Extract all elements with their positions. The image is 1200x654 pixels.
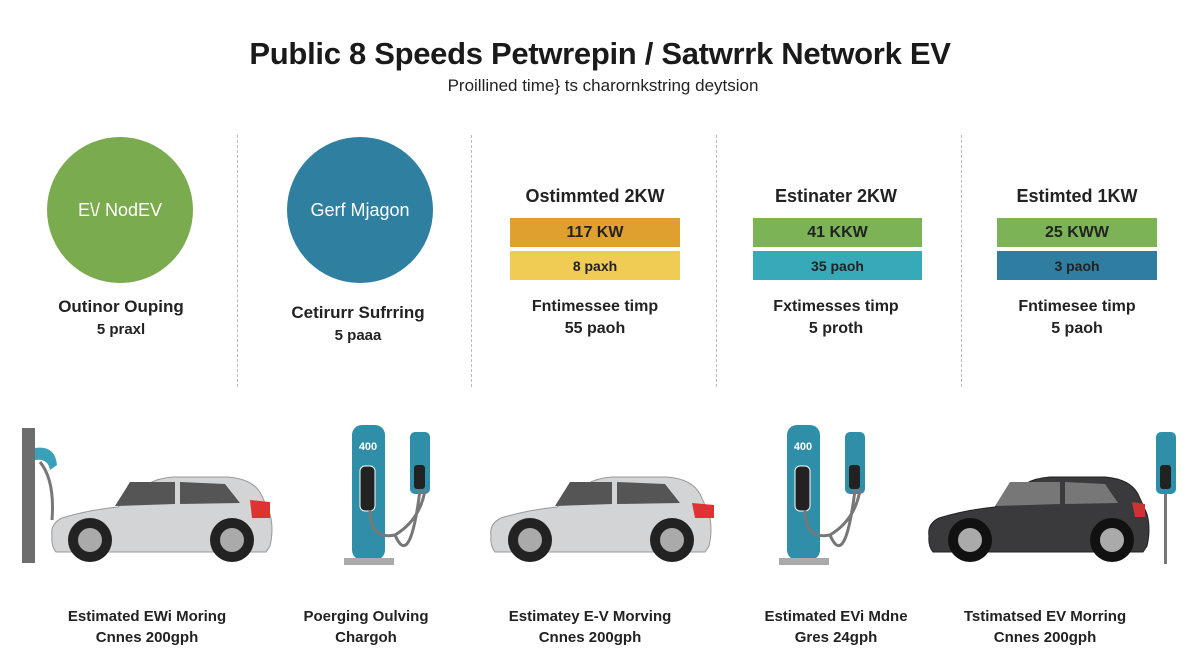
text: Estimated EWi Moring (68, 608, 226, 625)
text: Cnnes 200gph (994, 629, 1096, 646)
text: 8 paxh (573, 258, 617, 274)
icon: post charger (1156, 432, 1176, 564)
icon: car 2 (491, 477, 714, 562)
text: circle 1 label: Outinor Ouping (58, 297, 184, 316)
text: circle 1 label: 5 praxl (97, 321, 145, 338)
icon: car 1 (52, 477, 272, 562)
text: 5 proth (809, 320, 863, 337)
text: 3 paoh (1054, 258, 1100, 274)
subtitle: Proillined time} ts charornkstring deytsion (448, 76, 758, 95)
text: Cnnes 200gph (96, 629, 198, 646)
text: circle 1 label (58, 297, 184, 338)
text: Estinater 2KW (775, 186, 897, 206)
panel: circle 2 (287, 137, 433, 283)
panel: column 5 (997, 186, 1157, 337)
text: circle 2 label (291, 303, 425, 344)
text: Ostimmted 2KW (525, 186, 665, 206)
icon: charger 1: 400 (359, 441, 377, 453)
panel: circle 1: E\/ NodEV (78, 200, 162, 220)
text: Tstimatsed EV Morring (964, 608, 1126, 625)
text: Fntimessee timp (532, 298, 658, 315)
text: 41 KKW (807, 224, 868, 240)
text: 25 KWW (1045, 224, 1109, 240)
text: Estimatey E-V Morving (509, 608, 671, 625)
panel: column 3 (510, 186, 680, 337)
text: circle 2 label: 5 paaa (335, 327, 381, 344)
text: 5 paoh (1051, 320, 1103, 337)
icon: charger 1 (344, 425, 430, 565)
text: circle 2 label: Cetirurr Sufrring (291, 303, 425, 322)
bottom labels (68, 608, 1126, 646)
text: 117 KW (567, 224, 623, 240)
text: Estimated EVi Mdne (764, 608, 908, 625)
icon: charger 2 (779, 425, 865, 565)
text: Fntimesee timp (1018, 298, 1136, 315)
icon: wall charger (22, 428, 57, 563)
text: 35 paoh (811, 258, 864, 274)
text: 55 paoh (565, 320, 625, 337)
title: Public 8 Speeds Petwrepin / Satwrrk Network EV (249, 36, 951, 71)
text: Estimted 1KW (1016, 186, 1138, 206)
text: Gres 24gph (795, 629, 877, 646)
icon: charger 2: 400 (794, 441, 812, 453)
panel: circle 2: Gerf Mjagon (310, 200, 410, 220)
text: Chargoh (335, 629, 397, 646)
panel: column 4 (753, 186, 922, 337)
panel: circle 1 (47, 137, 193, 283)
text: Poerging Oulving (303, 608, 429, 625)
text: Fxtimesses timp (773, 298, 899, 315)
text: Cnnes 200gph (539, 629, 641, 646)
icon: car 3 dark (929, 477, 1149, 562)
